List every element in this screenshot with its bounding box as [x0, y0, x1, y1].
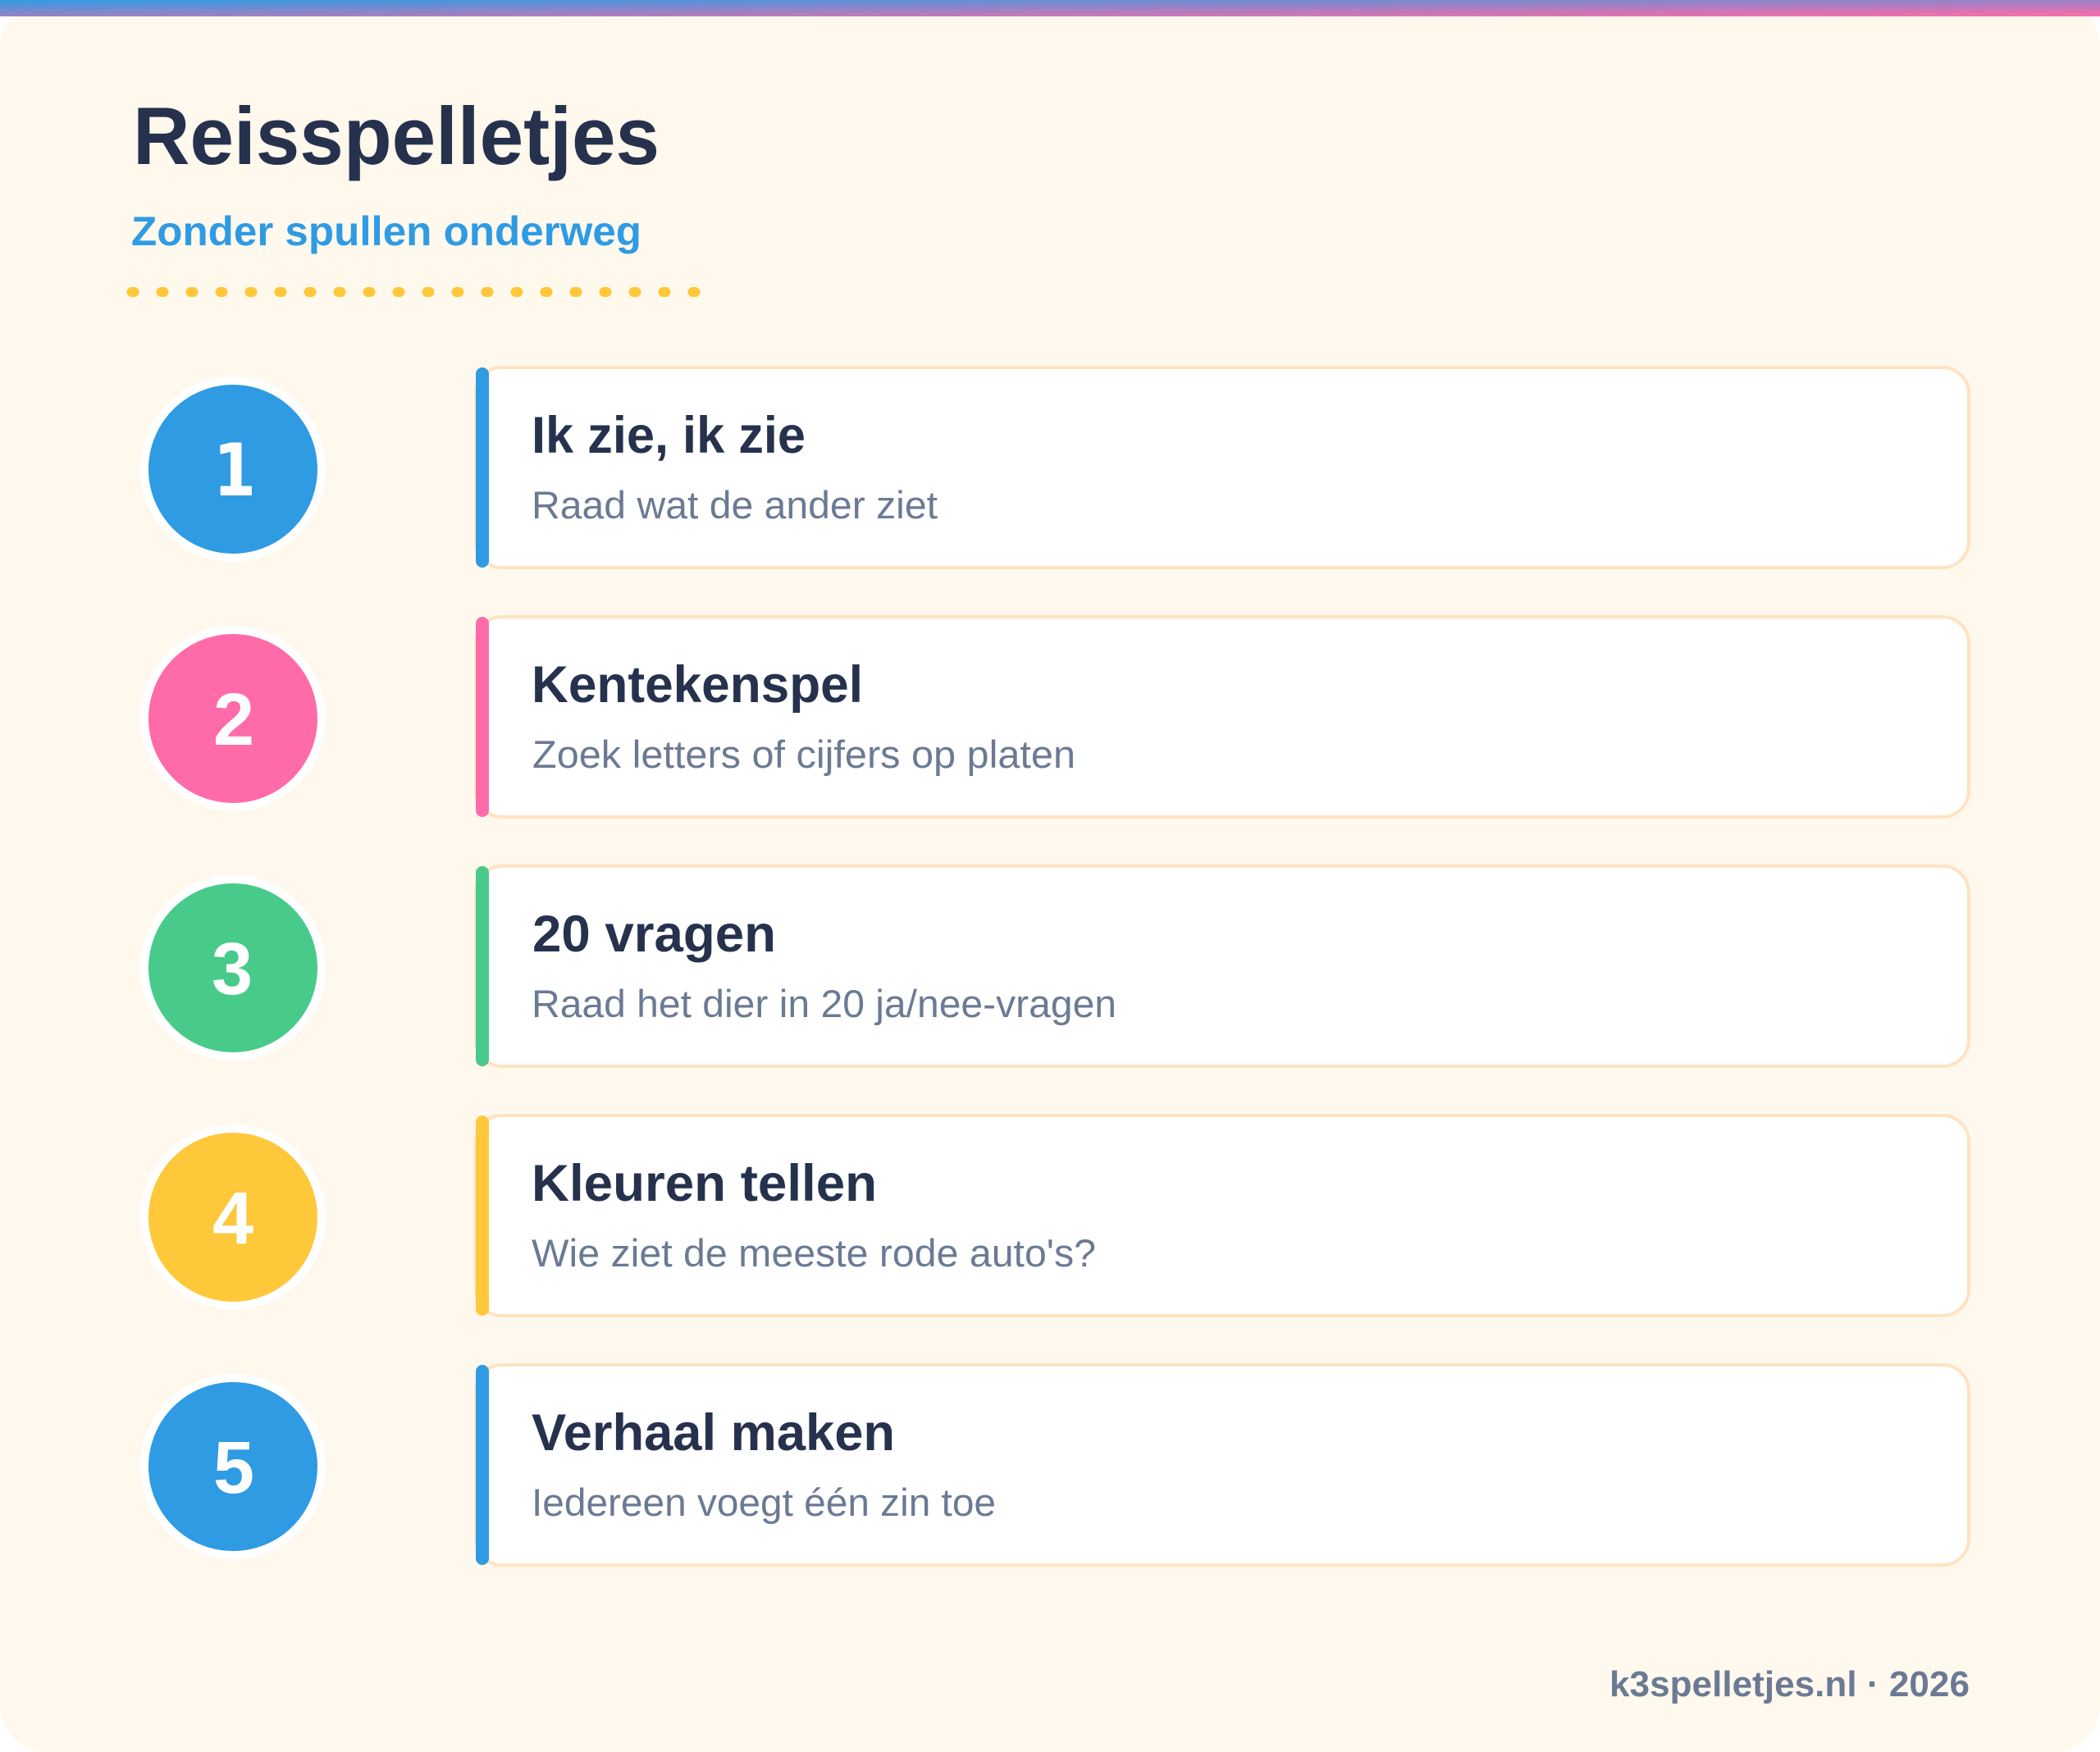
card 5 heading: Verhaal maken — [532, 1404, 895, 1462]
card 2 heading: Kentekenspel — [532, 656, 863, 714]
card 3 — [476, 866, 1969, 1066]
card 1 heading: Ik zie, ik zie — [532, 407, 806, 464]
accent bar 3 — [476, 866, 489, 1066]
top gradient bar — [0, 0, 2100, 16]
number badge 5 — [144, 1378, 322, 1555]
card 4 heading: Kleuren tellen — [532, 1155, 877, 1212]
card 5 — [476, 1365, 1969, 1565]
number badge 1 — [144, 381, 322, 558]
accent bar 2 — [476, 617, 489, 817]
accent bar 4 — [476, 1116, 489, 1316]
panel: game 4 — [144, 1116, 1969, 1316]
footer credit: k3spelletjes.nl · 2026 — [1609, 1664, 1970, 1704]
number badge 2 — [144, 630, 322, 807]
card 2 — [476, 617, 1969, 817]
number badge 3: 3 — [212, 928, 253, 1011]
subtitle: Zonder spullen onderweg — [131, 208, 641, 254]
card 3 description: Raad het dier in 20 ja/nee-vragen — [532, 982, 1116, 1025]
card 1 — [476, 367, 1969, 568]
card 2 description: Zoek letters of cijfers op platen — [532, 732, 1075, 776]
number badge 5: 5 — [213, 1427, 254, 1509]
panel: game 3 — [144, 866, 1969, 1066]
card 4 description: Wie ziet de meeste rode auto's? — [532, 1231, 1096, 1275]
dotted divider — [131, 287, 697, 297]
panel: game 2 — [144, 617, 1969, 817]
number badge 1: 1 — [213, 428, 256, 513]
accent bar 1 — [476, 367, 489, 568]
card 1 description: Raad wat de ander ziet — [532, 483, 938, 527]
panel: game 1 — [144, 367, 1969, 568]
number badge 4: 4 — [212, 1178, 253, 1260]
card 4 — [476, 1116, 1969, 1316]
title: Reisspelletjes — [133, 90, 660, 181]
number badge 4 — [144, 1129, 322, 1306]
accent bar 5 — [476, 1365, 489, 1565]
number badge 2: 2 — [213, 679, 254, 761]
number badge 3 — [144, 879, 322, 1056]
card 3 heading: 20 vragen — [532, 906, 776, 963]
panel: game 5 — [144, 1365, 1969, 1565]
card 5 description: Iedereen voegt één zin toe — [532, 1481, 996, 1524]
